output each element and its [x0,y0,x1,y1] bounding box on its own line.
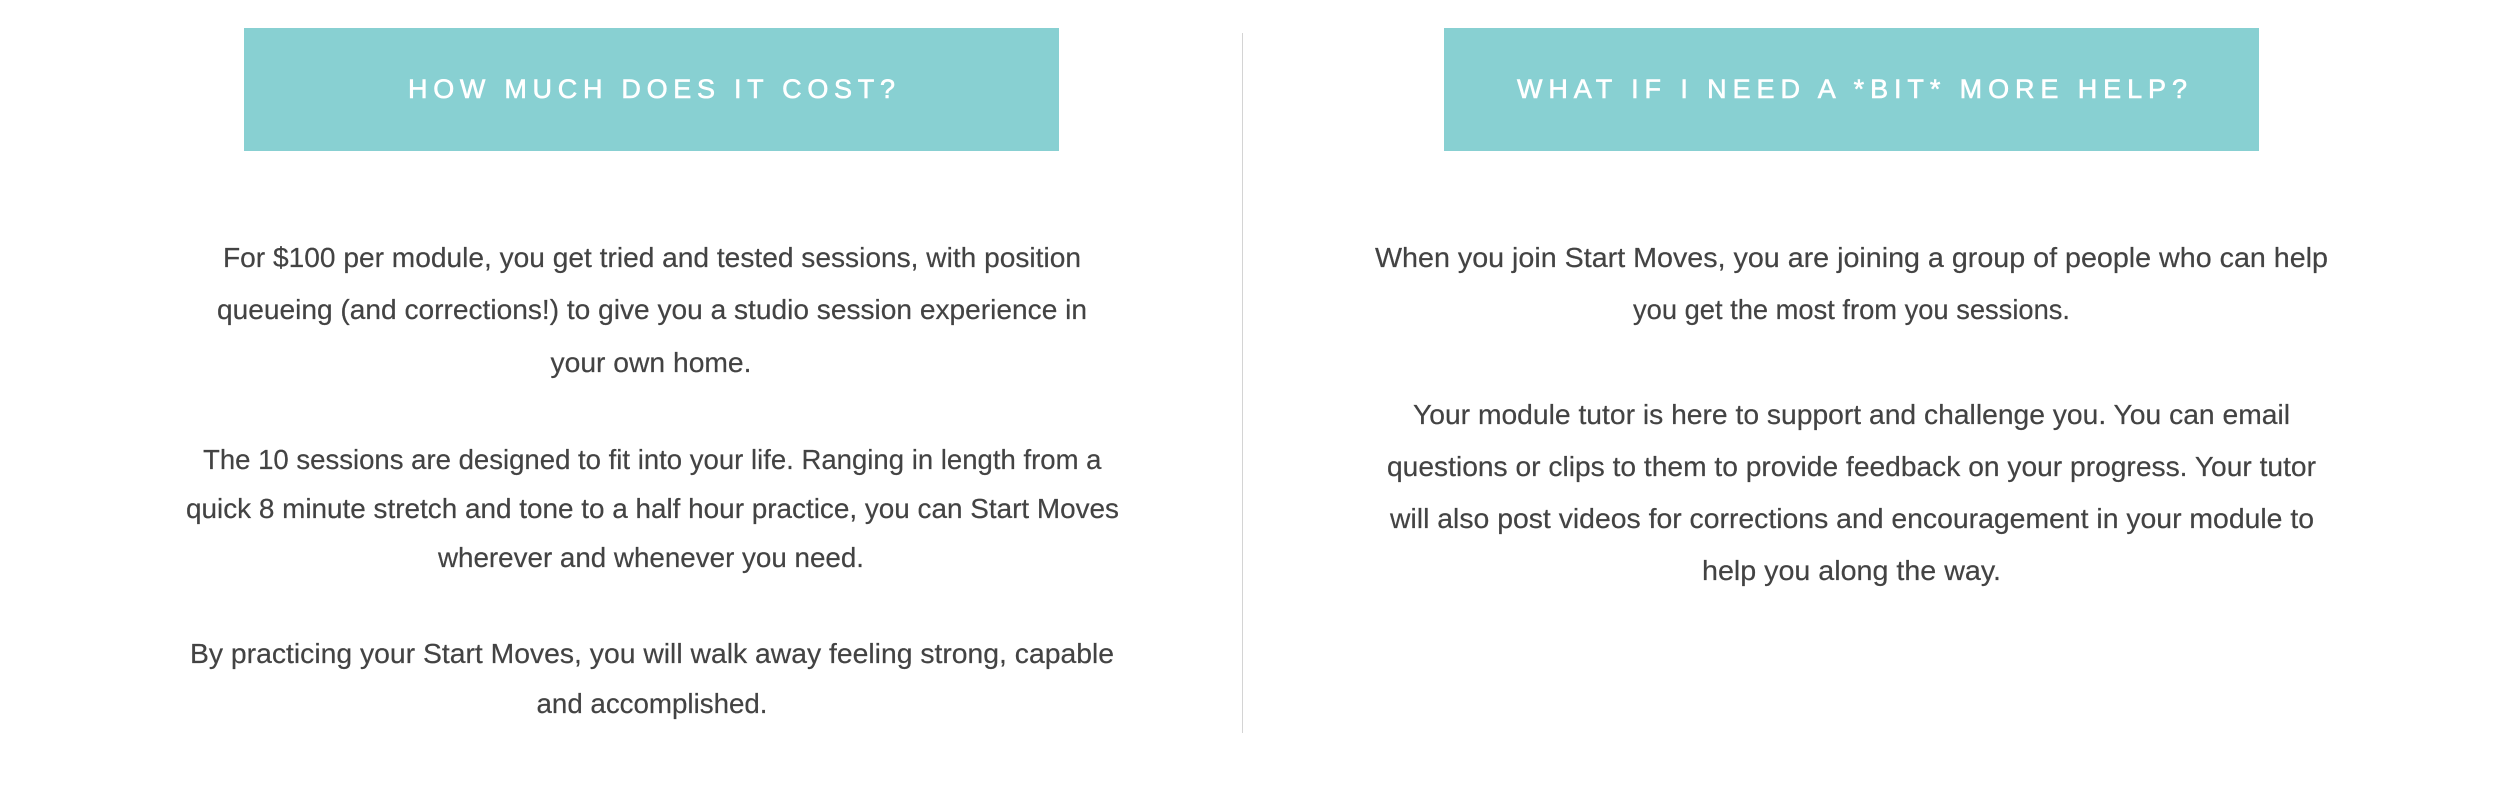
text block: community paragraph [1375,242,2328,325]
panel: how much does it cost [186,28,1119,719]
text block: sessions paragraph: The 10 sessions are designed to fit into your life. Ranging in length from a [203,444,1102,475]
text block: price paragraph [217,242,1087,378]
text block: sessions paragraph: quick 8 minute stretch and tone to a half hour practice, you can Start Moves [186,493,1119,524]
text block: price paragraph: For $100 per module, you get tried and tested sessions, with position [223,242,1081,273]
heading banner: cost [244,28,1059,151]
text block: tutor paragraph: will also post videos for corrections and encouragement in your module to [1389,503,2314,534]
text block: tutor paragraph: help you along the way. [1702,555,2001,586]
heading banner: help: WHAT IF I NEED A *BIT* MORE HELP? [1517,74,2193,104]
text block: price paragraph: your own home. [550,347,752,378]
text block: sessions paragraph [186,444,1119,573]
text block: sessions paragraph: wherever and whenever you need. [437,542,864,573]
text block: tutor paragraph [1387,399,2316,586]
heading banner: help [1444,28,2259,151]
text block: outcome paragraph [190,638,1114,719]
text block: community paragraph: you get the most from you sessions. [1633,294,2070,325]
panel: what if I need more help [1375,28,2328,586]
text block: price paragraph: queueing (and corrections!) to give you a studio session experience in [217,294,1087,325]
text block: tutor paragraph: questions or clips to them to provide feedback on your progress. Your tutor [1387,451,2316,482]
text block: outcome paragraph: and accomplished. [536,688,768,719]
text block: tutor paragraph: Your module tutor is here to support and challenge you. You can email [1413,399,2290,430]
heading banner: cost: HOW MUCH DOES IT COST? [408,74,901,104]
text block: outcome paragraph: By practicing your Start Moves, you will walk away feeling strong, capable [190,638,1114,669]
text block: community paragraph: When you join Start Moves, you are joining a group of people who can help [1375,242,2328,273]
